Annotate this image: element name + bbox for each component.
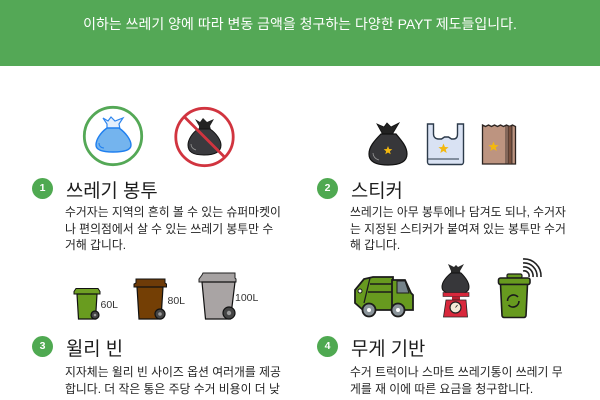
text 1: 수거자는 지역의 흔히 볼 수 있는 슈퍼마켓이 [65,205,281,219]
badge 4: 4 [325,340,330,352]
text 3: 합니다. 더 작은 통은 주당 수거 비용이 더 낮 [65,382,280,396]
icon: forbidden black bag [176,108,233,166]
section 3: wheelie bin [32,336,281,396]
text 1: 나 편의점에서 살 수 있는 쓰레기 봉투만 수 [65,222,273,236]
text 4: 수거 트럭이나 스마트 쓰레기통이 쓰레기 무 [350,365,563,379]
text 2 [350,205,566,252]
badge 1 [32,178,53,199]
text 4 [350,365,563,396]
heading 4: 무게 기반 [351,338,425,359]
icon: black bag with star sticker [369,123,407,165]
text 4: 게를 재 이에 따른 요금을 청구합니다. [350,382,533,396]
text 1 [65,205,281,252]
icon: garbage truck [355,277,413,316]
text 2: 는 지정된 스티커가 붙여져 있는 봉투만 수거 [350,222,566,236]
top banner [0,0,600,66]
heading 1: 쓰레기 봉투 [66,180,158,201]
icon: paper bag with star sticker [482,125,516,164]
banner text: 이하는 쓰레기 양에 따라 변동 금액을 청구하는 다양한 PAYT 제도들입니다. [83,16,517,32]
label: 80L: 80L [168,295,185,307]
icon: bag on red scale [442,264,469,317]
icon: smart bin with wifi signal [498,259,541,318]
icon: 60L green bin [74,288,118,319]
section 2: sticker [317,178,566,252]
badge 3: 3 [40,340,45,352]
label: 100L: 100L [235,292,259,304]
section 1: garbage bag [32,178,281,252]
icon: allowed blue bag [84,107,142,165]
icon: 100L grey bin [199,273,259,319]
text 1: 거해 갑니다. [65,238,126,252]
icon: plastic bag with star sticker [428,124,464,164]
text 3 [65,365,281,396]
badge 2 [317,178,338,199]
section 4: weight based [317,336,563,396]
label: 60L: 60L [100,299,118,311]
badge 1: 1 [40,182,45,194]
heading 3: 윌리 빈 [66,338,123,359]
heading 2: 스티커 [351,180,403,201]
text 2: 쓰레기는 아무 봉투에나 담겨도 되나, 수거자 [350,205,566,219]
badge 4 [317,336,338,357]
icon: 80L brown bin [134,279,185,319]
text 2: 해 갑니다. [350,238,400,252]
badge 2: 2 [325,182,330,194]
badge 3 [32,336,53,357]
text 3: 지자체는 윌리 빈 사이즈 옵션 여러개를 제공 [65,365,281,379]
